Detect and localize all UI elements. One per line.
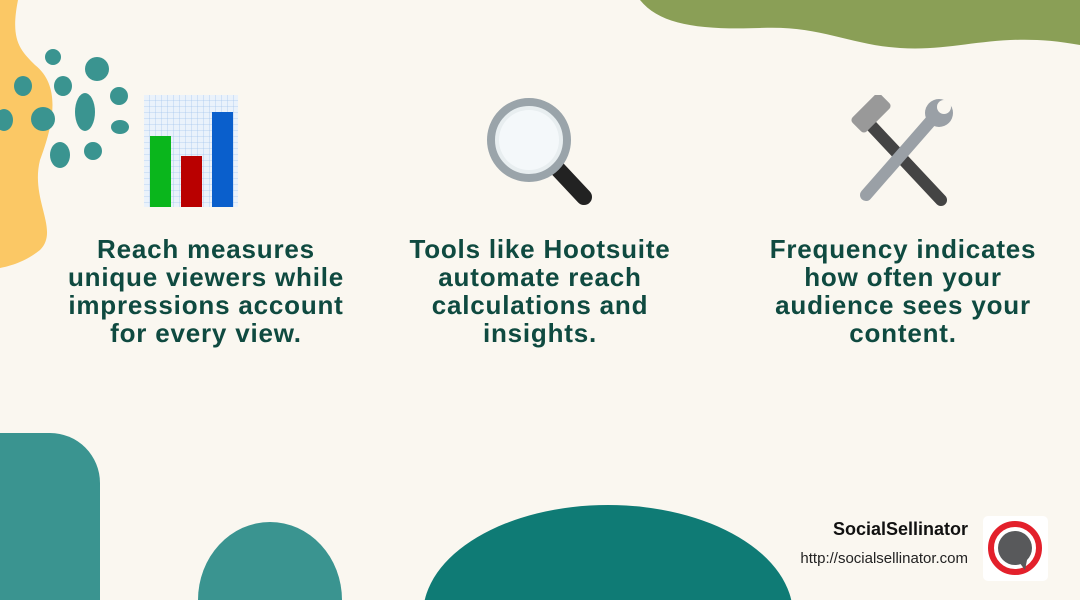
text: frequency: Frequency indicates <box>770 234 1036 264</box>
icon: hammer and wrench <box>852 95 953 206</box>
text: frequency: content. <box>849 318 957 348</box>
text: tools: automate reach <box>438 262 642 292</box>
icon: magnifying glass <box>487 98 592 205</box>
text: tools: insights. <box>483 318 597 348</box>
logo <box>983 516 1048 581</box>
text: frequency <box>770 234 1036 348</box>
text: reach: Reach measures <box>97 234 315 264</box>
text: reach: impressions account <box>68 290 344 320</box>
text: tools: calculations and <box>432 290 648 320</box>
yellow blob <box>0 0 52 268</box>
text: reach <box>68 234 344 348</box>
icon: bar chart <box>144 95 238 207</box>
text: tools: Tools like Hootsuite <box>409 234 671 264</box>
big semicircle <box>423 505 793 600</box>
bottom left teal block <box>0 433 100 600</box>
small semicircle <box>198 522 342 600</box>
text: frequency: audience sees your <box>775 290 1031 320</box>
text: reach: for every view. <box>110 318 302 348</box>
text: reach: unique viewers while <box>68 262 344 292</box>
olive blob <box>640 0 1080 48</box>
teal dots <box>0 49 129 168</box>
text: frequency: how often your <box>804 262 1002 292</box>
text: tools <box>409 234 671 348</box>
brand name: SocialSellinator <box>833 519 968 539</box>
brand url: http://socialsellinator.com <box>800 550 968 567</box>
